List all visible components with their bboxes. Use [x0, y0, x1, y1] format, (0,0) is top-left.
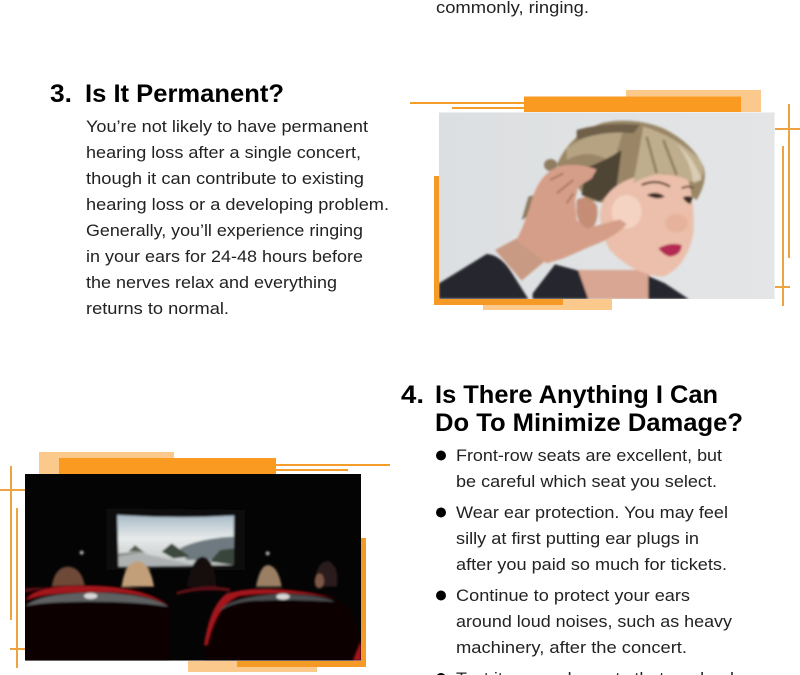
bullet list: section 4	[436, 446, 734, 675]
bullet list: section 4: silly at first putting ear plugs in	[456, 529, 699, 548]
text block: section 3 body: You’re not likely to have permanent	[86, 117, 368, 136]
heading: section 3: 3.	[50, 80, 72, 108]
bullet list: section 4: Wear ear protection. You may feel	[456, 503, 728, 522]
heading: section 4: Is There Anything I Can	[435, 381, 718, 409]
bullet list: section 4: Front-row seats are excellent, but	[456, 446, 722, 465]
text block: section 3 body: in your ears for 24-48 hours before	[86, 247, 363, 266]
heading: section 4: Do To Minimize Damage?	[435, 409, 743, 437]
text block: section 3 body: though it can contribute to existing	[86, 169, 364, 188]
bullet list: section 4: be careful which seat you select.	[456, 472, 717, 491]
text block: section 3 body	[86, 117, 389, 318]
text block: section 3 body: Generally, you’ll experience ringing	[86, 221, 363, 240]
heading: section 4: 4.	[401, 381, 424, 409]
text block: section 3 body: returns to normal.	[86, 299, 229, 318]
decorative frame: section 3 photo	[410, 90, 800, 310]
bullet list: section 4: Continue to protect your ears	[456, 586, 690, 605]
heading: section 3: Is It Permanent?	[85, 80, 284, 108]
text block: section 3 body: hearing loss after a single concert,	[86, 143, 361, 162]
bullet list: section 4: after you paid so much for tickets.	[456, 555, 727, 574]
bullet list: section 4: machinery, after the concert.	[456, 638, 687, 657]
bullet list: section 4: around loud noises, such as heavy	[456, 612, 733, 631]
photo: cinema audience facing the screen	[25, 474, 361, 661]
text block: section 3 body: the nerves relax and everything	[86, 273, 337, 292]
heading: section 4	[401, 381, 743, 437]
text block: section 3 body: hearing loss or a developing problem.	[86, 195, 389, 214]
decorative frame: section 4 photo	[0, 452, 390, 672]
photo: woman cupping her ear	[439, 112, 775, 299]
